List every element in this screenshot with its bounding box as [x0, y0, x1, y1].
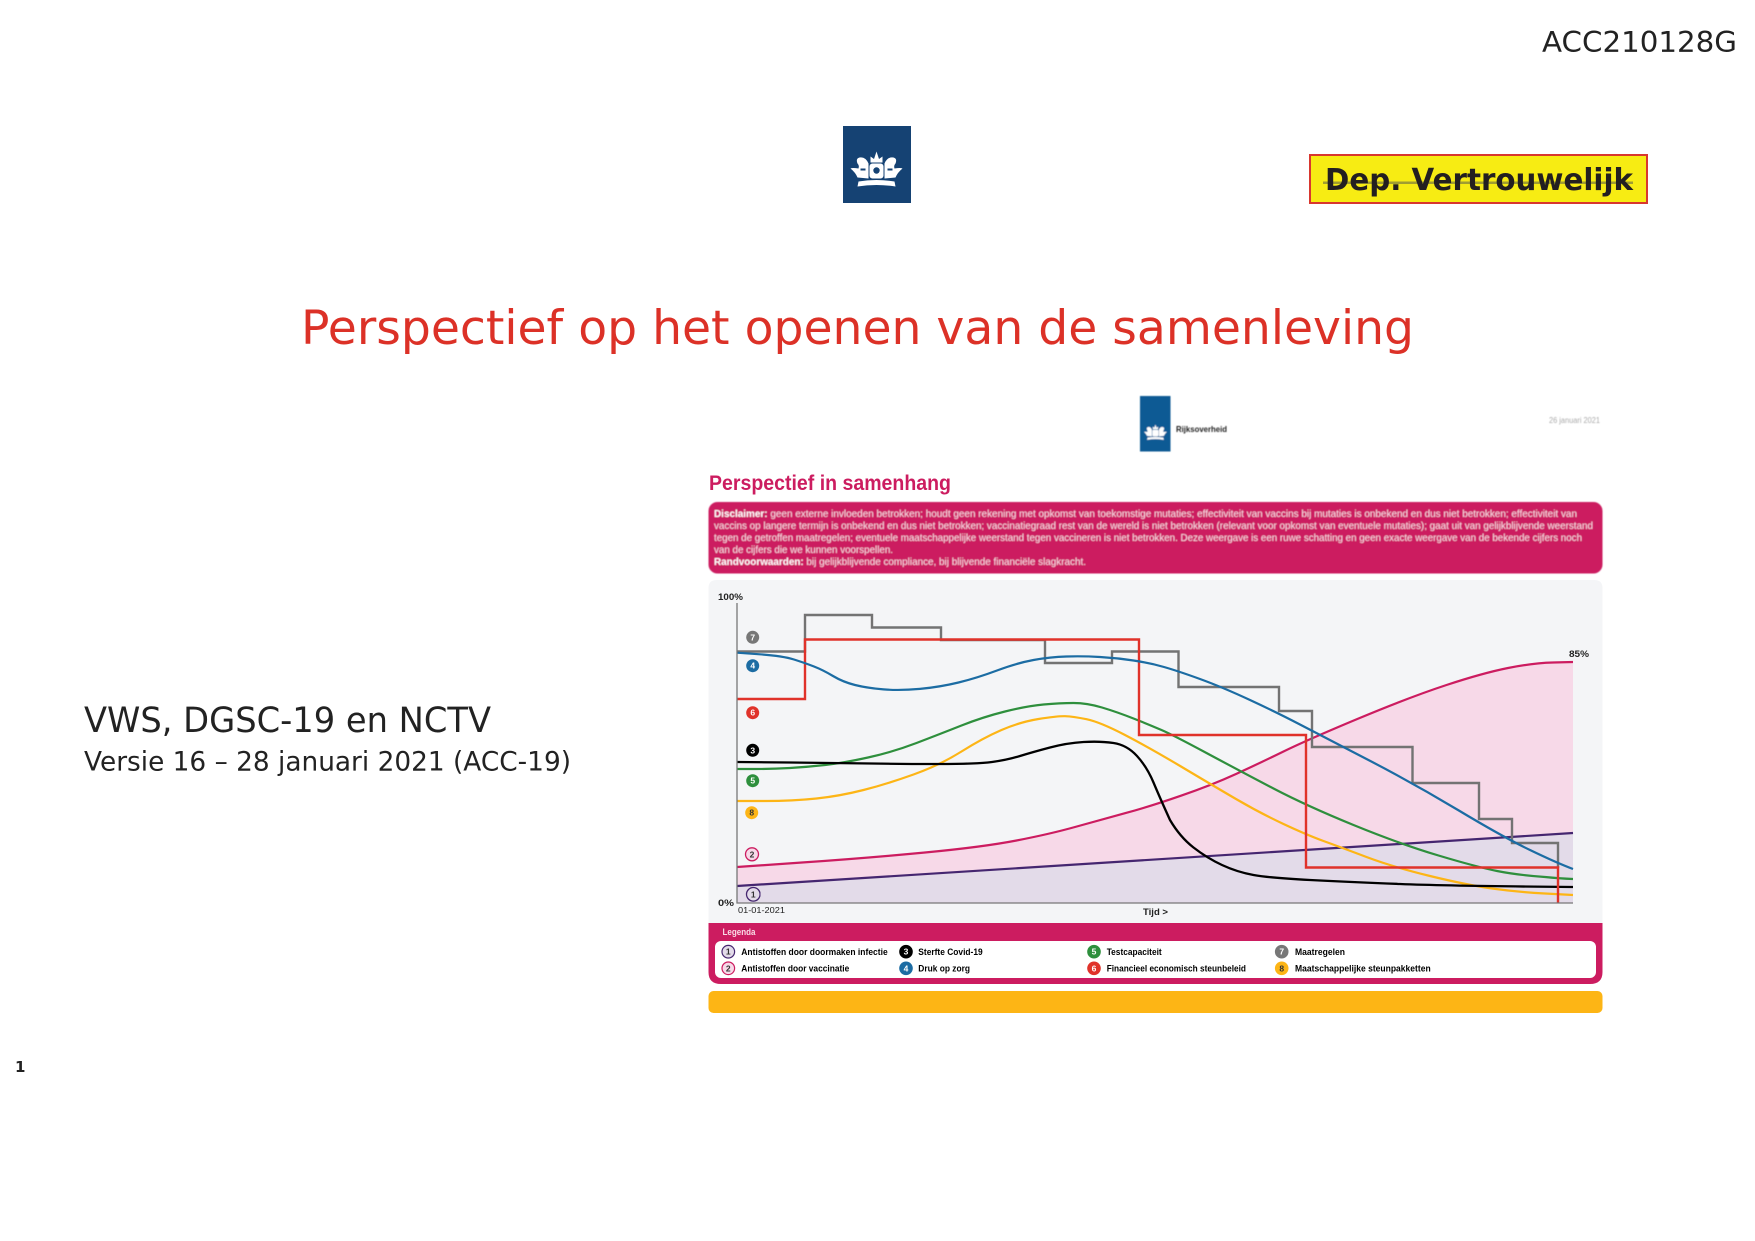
panel: disclaimer: Disclaimer: geen externe invloeden betrokken; houdt geen rekening met opkomst van toekomstige mutaties; effectiviteit van vaccins bij mutaties is onbekend en dus niet betrokken; effectiviteit van: [714, 508, 1577, 520]
legend items: 8: [1279, 963, 1284, 973]
axis labels: Tijd >: [1143, 907, 1168, 918]
legend items: Antistoffen door vaccinatie: [741, 964, 849, 974]
subtitle block: Versie 16 – 28 januari 2021 (ACC-19): [84, 746, 571, 778]
heading: Perspectief in samenhang: [709, 472, 951, 495]
panel: legend: [708, 923, 1602, 984]
chart markers: 3: [750, 745, 755, 755]
label: Dep. Vertrouwelijk: Dep. Vertrouwelijk: [1325, 163, 1634, 198]
axis labels: 01-01-2021: [738, 905, 785, 915]
axes: [737, 603, 1573, 903]
chart markers: 5: [750, 776, 755, 786]
legend items: Antistoffen door doormaken infectie: [741, 947, 888, 957]
area: antistoffen vaccinatie: [737, 662, 1573, 903]
legend items: 4: [904, 963, 909, 973]
icon: Rijksoverheid logo: [843, 126, 911, 203]
axis labels: 0%: [718, 898, 735, 909]
legend title: Legenda: [722, 927, 756, 937]
legend items: 3: [904, 947, 909, 957]
chart markers: 1: [751, 889, 756, 899]
axis labels: 100%: [718, 592, 744, 603]
panel: disclaimer: [708, 502, 1602, 574]
line: 3 sterfte: [737, 742, 1573, 887]
line: 1 antistoffen infectie: [737, 833, 1573, 886]
line: 5 testcapaciteit: [737, 703, 1573, 879]
chart markers: 8: [749, 808, 754, 818]
legend items: Druk op zorg: [918, 964, 970, 974]
line: 7 maatregelen: [737, 615, 1558, 868]
legend items: 6: [1092, 963, 1097, 973]
legend body: [715, 941, 1596, 978]
area: antistoffen infectie: [737, 833, 1573, 903]
subtitle block: [84, 701, 571, 778]
date: 26 januari 2021: [1549, 416, 1601, 425]
legend items: Sterfte Covid-19: [918, 947, 983, 957]
legend items: [722, 945, 1431, 975]
chart: perspectief curves: [737, 603, 1573, 903]
line: 2 antistoffen vaccinatie: [737, 662, 1573, 867]
icon: inner Rijksoverheid logo: [1140, 396, 1170, 452]
line: 4 druk op zorg: [737, 653, 1573, 869]
wordmark: Rijksoverheid: [1176, 424, 1227, 434]
legend items: 2: [726, 963, 731, 973]
page number: 1: [15, 1058, 25, 1076]
panel: chart background: [708, 580, 1602, 930]
legend items: Maatregelen: [1295, 947, 1345, 957]
legend items: 1: [726, 947, 731, 957]
chart markers: 6: [750, 708, 755, 718]
legend items: Testcapaciteit: [1107, 947, 1162, 957]
chart markers: [745, 631, 760, 901]
line: 8 steunpakketten: [737, 716, 1573, 895]
legend items: Maatschappelijke steunpakketten: [1295, 964, 1431, 974]
panel: disclaimer: tegen de getroffen maatregelen; eventuele maatschappelijke weerstand tegen vaccineren is niet betrokken. Deze weergave is een ruwe schatting en geen exacte weergave van de bekende cijfers noch: [714, 532, 1582, 544]
subtitle block: VWS, DGSC-19 en NCTV: [84, 701, 491, 741]
title: Perspectief op het openen van de samenleving: [301, 301, 1414, 356]
chart markers: 4: [750, 661, 755, 671]
axis labels: 85%: [1569, 649, 1590, 660]
axis labels: [718, 592, 1590, 918]
panel: disclaimer: Randvoorwaarden: bij gelijkblijvende compliance, bij blijvende financiële slagkracht.: [714, 556, 1086, 568]
panel: disclaimer: van de cijfers die we kunnen voorspellen.: [714, 544, 893, 556]
legend items: 7: [1279, 947, 1284, 957]
chart markers: 2: [750, 849, 755, 859]
line: 6 financieel steunbeleid: [737, 640, 1558, 903]
panel: embedded slide Perspectief in samenhang: [708, 396, 1602, 1013]
chart markers: 7: [750, 632, 755, 642]
legend items: Financieel economisch steunbeleid: [1107, 964, 1246, 974]
document code: ACC210128G: [1542, 26, 1737, 59]
panel: disclaimer: vaccins op langere termijn is onbekend en dus niet betrokken; vaccinatiegraad rest van de wereld is niet betrokken (relevant voor opkomst van eventuele mutaties); gaat uit van gelijkblijvende weerstand: [714, 520, 1593, 532]
yellow bar: [708, 991, 1602, 1013]
legend items: 5: [1092, 947, 1097, 957]
label: Dep. Vertrouwelijk: [1310, 155, 1647, 203]
